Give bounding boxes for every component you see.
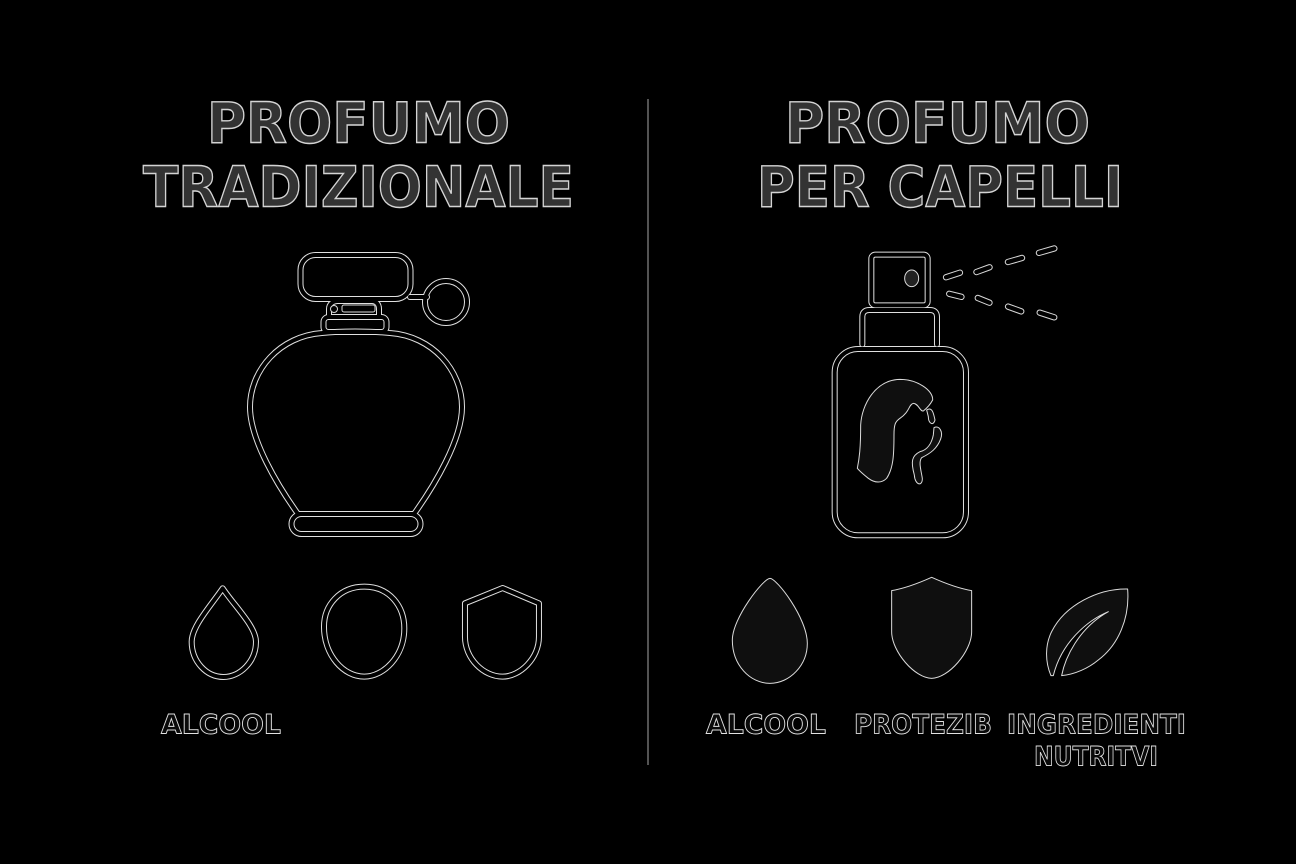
left benefit icons <box>192 587 539 677</box>
heading: profumo tradizionale: TRADIZIONALE <box>143 156 574 220</box>
spray nozzle hole <box>905 270 919 287</box>
label: alcool right: ALCOOL <box>706 710 826 740</box>
label: alcool left: ALCOOL <box>161 710 281 740</box>
label: protezib: PROTEZIB <box>854 710 992 740</box>
spray mist dashes <box>943 245 1058 321</box>
icon: alcohol drop filled <box>732 578 807 683</box>
heading: profumo per capelli: PROFUMO <box>785 92 1090 156</box>
icon: shield filled <box>892 577 972 678</box>
icon: empty circle <box>324 587 404 677</box>
icon: alcohol drop outline <box>192 588 256 677</box>
label: ingredienti nutritvi: INGREDIENTI <box>1007 710 1186 740</box>
heading: profumo tradizionale <box>143 92 574 220</box>
label: ingredienti nutritvi <box>1007 710 1186 772</box>
icon: leaf <box>1047 589 1128 676</box>
spray bottle body and pump <box>835 255 966 535</box>
icon: hair perfume spray bottle <box>835 245 1058 535</box>
label: ingredienti nutritvi: NUTRITVI <box>1034 742 1158 772</box>
hair silhouette <box>857 379 942 484</box>
icon: traditional perfume bottle <box>250 255 467 534</box>
icon: shield outline <box>465 588 539 677</box>
divider between the two columns <box>647 99 649 765</box>
heading: profumo per capelli: PER CAPELLI <box>757 156 1123 220</box>
heading: profumo tradizionale: PROFUMO <box>207 92 510 156</box>
heading: profumo per capelli <box>757 92 1123 220</box>
right benefit icons <box>732 577 1128 683</box>
